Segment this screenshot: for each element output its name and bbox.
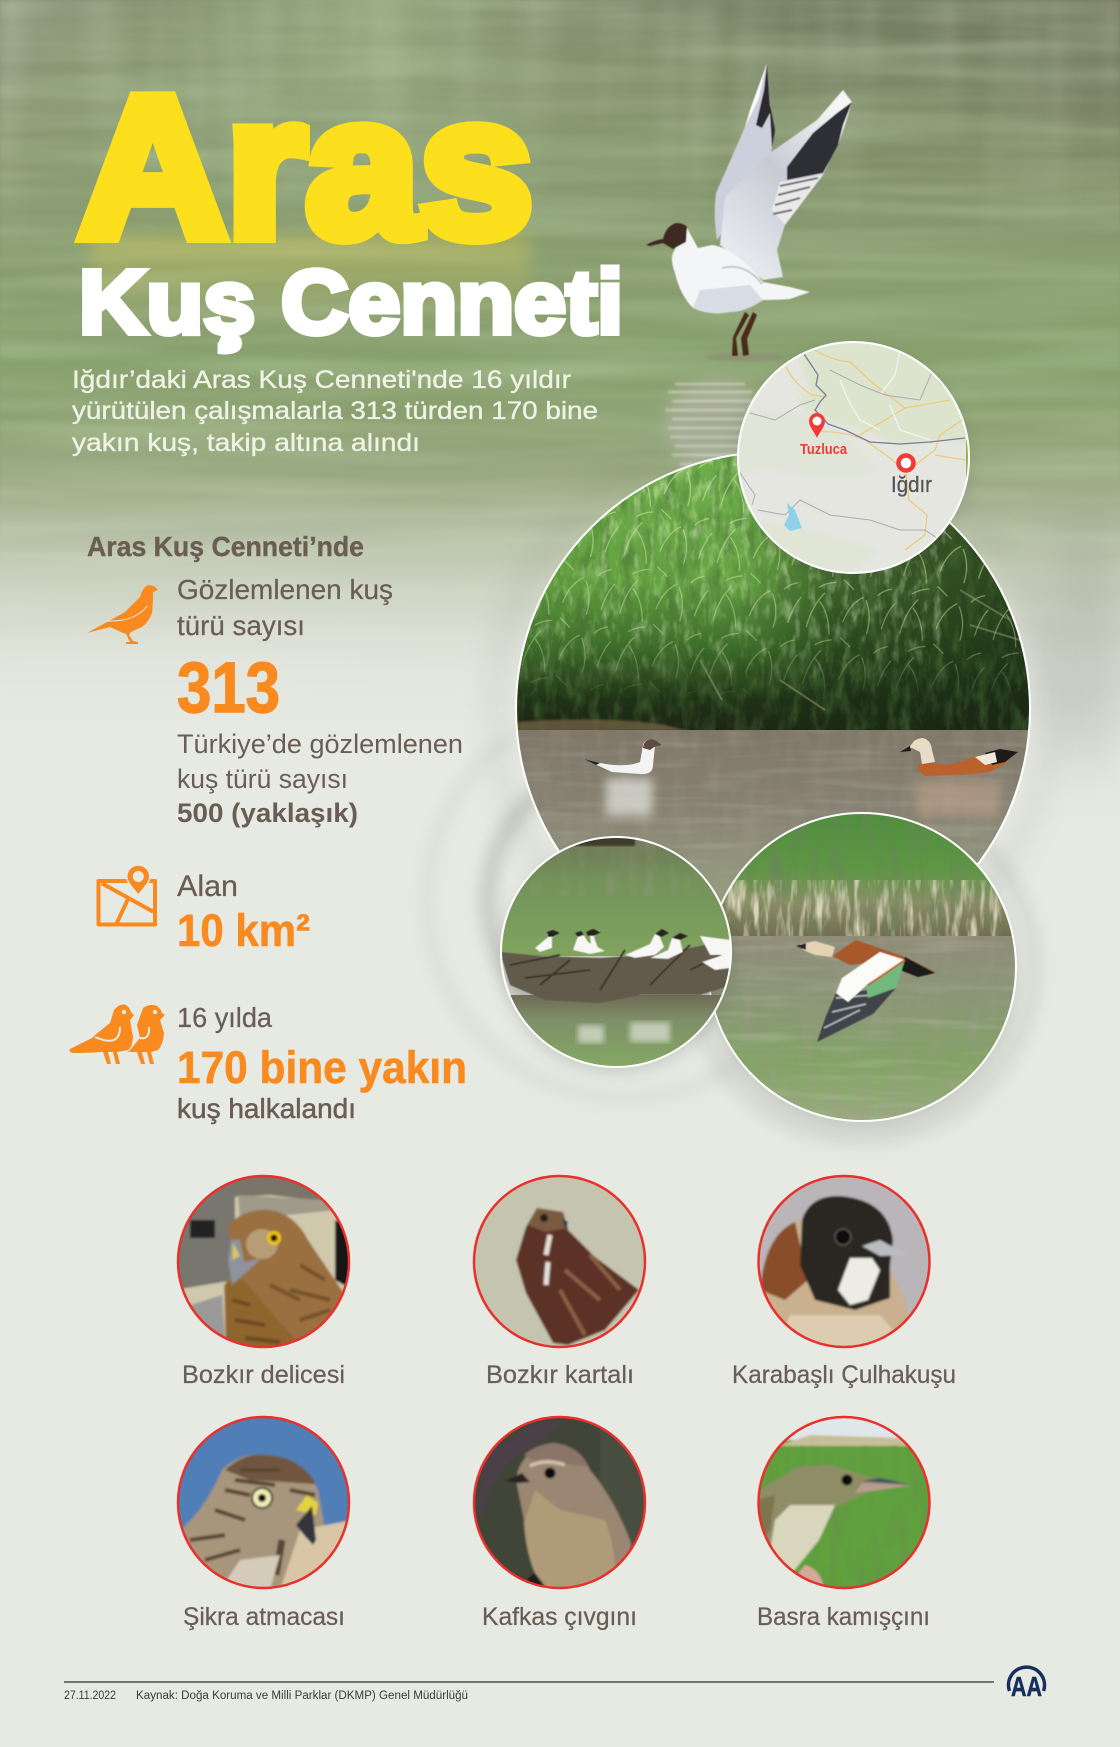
title: Aras: Aras [79, 56, 533, 279]
portrait: Karabaşlı Çulhakuşu [732, 1174, 956, 1389]
label: Karabaşlı Çulhakuşu [732, 1361, 956, 1389]
portrait: Basra kamışçını [757, 1415, 932, 1631]
icon: bird [87, 585, 158, 644]
pin: Tuzluca [809, 413, 825, 438]
gull legs [732, 312, 757, 356]
subtitle text block: Iğdır’daki Aras Kuş Cenneti'nde 16 yıldır [72, 366, 571, 394]
portrait: Şikra atmacası [175, 1415, 353, 1631]
reflecting water [708, 936, 1016, 1126]
upper water [500, 836, 732, 956]
map terrain [738, 342, 970, 574]
background: river water photo fading to pale [0, 0, 1120, 773]
border river [804, 354, 965, 444]
lake [784, 503, 802, 531]
label: Bozkır kartalı [486, 1361, 634, 1389]
icon: two birds [69, 1005, 165, 1064]
pin: Iğdır [898, 456, 914, 470]
photo circle: gulls on a mud bank [500, 836, 732, 1073]
subtitle text block: yürütülen çalışmalarla 313 türden 170 bine [72, 397, 598, 425]
resting gulls [535, 929, 731, 970]
grass bank [516, 452, 1030, 734]
icon: map with pin [98, 865, 155, 924]
title: Kuş Cenneti: Kuş Cenneti [79, 253, 623, 353]
label: Şikra atmacası [183, 1603, 345, 1631]
label: Kafkas çıvgını [482, 1603, 637, 1631]
flying shelduck bird [796, 940, 935, 1042]
gull head [646, 223, 687, 249]
stats panel [69, 531, 467, 1124]
mud bank [500, 945, 732, 1003]
gull front wing [720, 90, 852, 280]
stat number: 10 km2: 10 km² [177, 905, 310, 956]
stat label: ringed birds: kuş halkalandı [177, 1093, 356, 1124]
photo circle: wetland with gull and shelduck [515, 454, 1031, 902]
stat label: area: Alan [177, 870, 238, 903]
map roads [786, 349, 965, 550]
gull back wing [715, 63, 772, 240]
portrait: Bozkır kartalı [472, 1174, 648, 1389]
label: Iğdır: Iğdır [891, 472, 932, 497]
map white roads [840, 350, 930, 440]
swimming gull [584, 739, 662, 816]
stat: Turkey total: Türkiye’de gözlemlenen [177, 729, 463, 759]
subtitle text block [72, 366, 598, 457]
ripple rings around the photo group [427, 431, 1051, 1139]
footer: date and source: Kaynak: Doğa Koruma ve Milli Parklar (DKMP) Genel Müdürlüğü [136, 1690, 468, 1702]
stats panel: 500 (yaklaşık) [177, 798, 358, 828]
river water [518, 730, 1028, 902]
swimming shelduck [900, 738, 1018, 816]
reeds [708, 813, 1016, 938]
portrait: Kafkas çıvgını [472, 1415, 648, 1631]
label: Bozkır delicesi [182, 1361, 345, 1389]
portrait: Bozkır delicesi [175, 1174, 353, 1389]
stat number: 313: 313 [177, 649, 280, 728]
subtitle text block: yakın kuş, takip altına alındı [72, 429, 420, 457]
stats heading: Aras Kuş Cenneti’nde [87, 531, 364, 562]
footer: date and source: 27.11.2022 [64, 1690, 116, 1702]
label: Tuzluca: Tuzluca [800, 442, 848, 458]
map circle [738, 342, 970, 578]
stats panel: türü sayısı [177, 610, 305, 641]
grey country line [738, 370, 942, 540]
stats panel: kuş türü sayısı [177, 764, 348, 794]
label: Basra kamışçını [757, 1603, 930, 1631]
gull body [672, 228, 810, 313]
stat number: 170 thousand: 170 bine yakın [177, 1042, 467, 1093]
photo circle: flying shelduck over reeds [708, 813, 1016, 1129]
logo: AA: AA [1011, 1671, 1042, 1702]
lower water [510, 995, 722, 1066]
photo: black-headed gull taking off [646, 63, 852, 361]
stat label: 16 years: 16 yılda [177, 1002, 273, 1033]
stat label: observed species: Gözlemlenen kuş [177, 574, 393, 605]
